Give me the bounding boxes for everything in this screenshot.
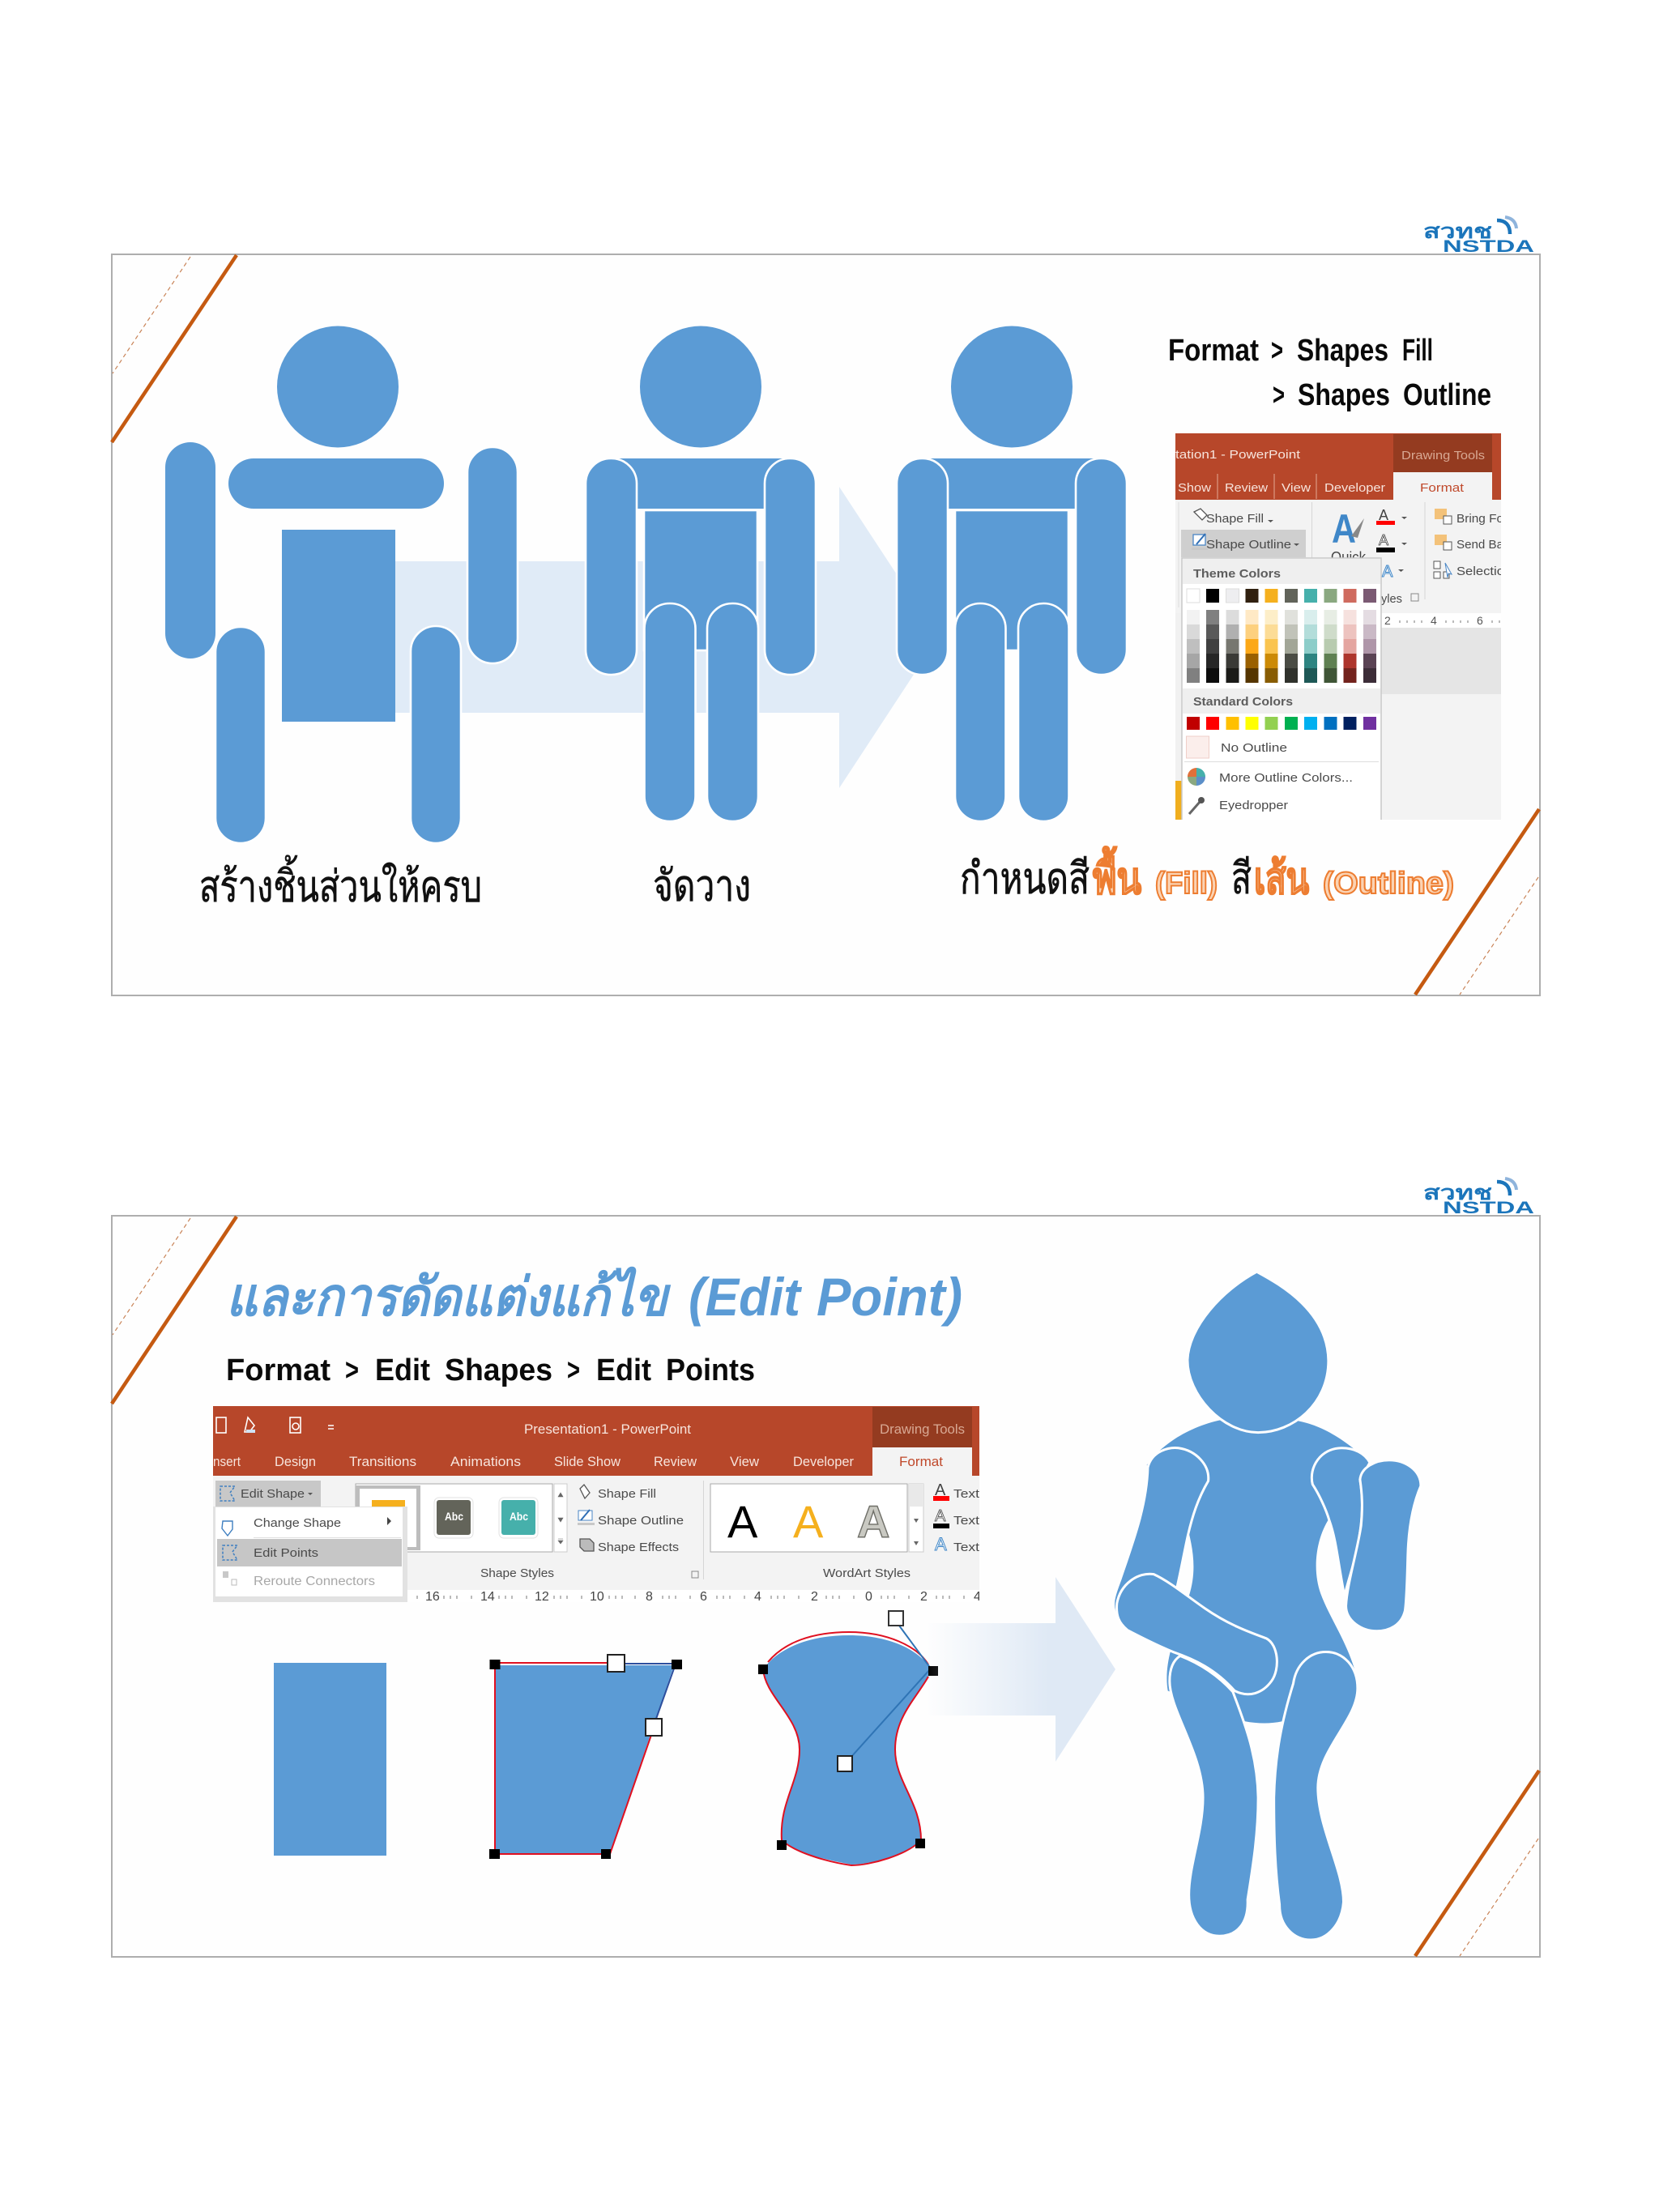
edit shape button: Edit Shape [241, 1487, 305, 1501]
heading: format shapes fill: Format [1168, 334, 1259, 368]
ruler: 4 [1431, 614, 1437, 627]
ribbon tabs: Design [275, 1454, 316, 1469]
ruler: 2 [920, 1590, 928, 1604]
menu item: eyedropper: Eyedropper [1219, 799, 1288, 812]
corner accents: slide 1 [112, 255, 1539, 995]
ribbon tabs: View [730, 1454, 760, 1469]
logo: NSTDA bottom slide [1423, 1178, 1534, 1217]
drawing tools tab: Drawing Tools [880, 1421, 965, 1437]
text fill, outline, effects commands: A [935, 1481, 946, 1499]
menu item: change shape: Change Shape [254, 1516, 341, 1530]
figure: coloured final [897, 326, 1127, 821]
title: edit point: และการดัดแต่งแก้ไข [226, 1266, 671, 1327]
ribbon body: Shape Fill [1206, 512, 1264, 526]
title: edit point: Point) [817, 1267, 962, 1327]
logo: NSTDA bottom slide: NSTDA [1443, 1199, 1534, 1217]
dropdown menu: edit shape [212, 1507, 407, 1602]
heading: format edit shapes edit points: Edit [596, 1353, 651, 1387]
ribbon tabs: Review [654, 1454, 697, 1469]
arrow: slide 2 progress [925, 1577, 1115, 1762]
corner accents: slide 2 [112, 1217, 1539, 1956]
menu item: reroute connectors [223, 1571, 375, 1588]
ribbon group labels: Shape Styles [480, 1566, 554, 1580]
arrow: slide 1 progress [394, 487, 938, 788]
panel: slide 1 frame [112, 254, 1540, 995]
menu item: edit points: Edit Points [254, 1546, 318, 1560]
shape style gallery: Abc [445, 1510, 463, 1523]
figure: seated person [1114, 1272, 1421, 1940]
menu item: no outline [1186, 736, 1287, 758]
ruler: 2 [1384, 614, 1391, 627]
drawing tools tab: Format [899, 1454, 943, 1469]
heading: format edit shapes edit points: Edit [375, 1353, 430, 1387]
menu item: eyedropper [1189, 797, 1288, 814]
left forearm [1117, 1574, 1277, 1694]
slide area behind menu [1175, 628, 1501, 820]
ribbon tabs: Developer [1324, 481, 1385, 495]
ribbon body [1175, 500, 1504, 613]
text fill, outline, effects commands: Text [953, 1487, 980, 1501]
ribbon tabs: Animations [450, 1454, 521, 1469]
shape: curved edited shape with handles [758, 1611, 938, 1865]
ribbon tabs: Transitions [349, 1454, 416, 1469]
ruler: 10 [590, 1590, 604, 1604]
ruler: 0 [865, 1590, 872, 1604]
caption: set fill and outline colours: พื้น [1093, 846, 1141, 903]
text fill, outline, effects commands: A [935, 1507, 946, 1525]
logo: NSTDA top slide: สวทช [1423, 220, 1492, 243]
heading: shapes outline: Outline [1403, 378, 1491, 412]
caption: set fill and outline colours: (Outline) [1323, 867, 1454, 901]
logo: NSTDA top slide [1423, 217, 1534, 256]
logo: NSTDA top slide: NSTDA [1443, 237, 1534, 256]
panel: slide 2 frame [112, 1216, 1540, 1957]
caption: set fill and outline colours: เส้น [1254, 855, 1309, 903]
logo: NSTDA bottom slide: สวทช [1423, 1182, 1492, 1204]
ruler: 14 [480, 1590, 495, 1604]
ribbon group labels [481, 1568, 911, 1579]
ruler: 8 [646, 1590, 653, 1604]
WordArt gallery: A [857, 1496, 889, 1547]
menu item: no outline: No Outline [1221, 741, 1287, 755]
heading: format edit shapes edit points: Shapes [445, 1353, 552, 1387]
dropdown menu: colours: Theme Colors [1193, 567, 1281, 581]
shape style gallery: Abc [510, 1510, 528, 1523]
ruler: 4 [754, 1590, 761, 1604]
ribbon body: Selectic [1456, 565, 1504, 578]
right forearm [1346, 1460, 1421, 1631]
shape fill, outline, effects commands [578, 1485, 684, 1554]
drawing tools tab: Format [1420, 481, 1465, 495]
ribbon tabs: Developer [793, 1454, 854, 1469]
heading: format edit shapes edit points: Points [666, 1353, 755, 1387]
title: edit point: (Edit [689, 1267, 803, 1327]
ribbon body: A [1379, 532, 1388, 548]
heading: format shapes fill: Fill [1402, 334, 1433, 368]
heading: format shapes fill [1168, 334, 1433, 368]
right upper arm [1311, 1448, 1370, 1596]
shape fill, outline, effects commands: Shape Effects [598, 1541, 679, 1554]
theme shade columns [1187, 610, 1376, 683]
title: edit point [226, 1266, 962, 1327]
torso [1147, 1420, 1370, 1724]
heading: format edit shapes edit points: > [567, 1353, 580, 1387]
ribbon tabs: Show [1178, 481, 1211, 495]
screenshot: PowerPoint edit shape menu: Presentation1 - PowerPoint [524, 1421, 691, 1437]
title bar [213, 1406, 979, 1476]
ribbon body: A [1332, 506, 1356, 552]
ruler: 16 [425, 1590, 440, 1604]
ruler: 2 [811, 1590, 818, 1604]
ribbon body: Quick [1331, 549, 1367, 565]
heading: format shapes fill: Shapes [1297, 334, 1388, 368]
caption: set fill and outline colours: (Fill) [1155, 867, 1218, 901]
shape fill, outline, effects commands: Shape Fill [598, 1487, 656, 1501]
ribbon body: Shape Outline [1206, 538, 1291, 552]
menu item: edit points [217, 1539, 402, 1566]
dropdown menu: colours: Standard Colors [1193, 695, 1293, 709]
standard colour swatches [1187, 717, 1376, 730]
shape style gallery [356, 1484, 567, 1552]
ribbon body: yles [1381, 592, 1402, 606]
heading: shapes outline: > [1273, 378, 1285, 412]
heading: shapes outline: Shapes [1298, 378, 1390, 412]
drawing tools tab [1393, 434, 1492, 500]
ribbon tabs [214, 1456, 854, 1469]
ruler: 4 [974, 1590, 981, 1604]
ruler [213, 1590, 981, 1604]
text fill, outline, effects commands: Text [953, 1541, 980, 1554]
figure: separate parts [165, 326, 518, 843]
screenshot: PowerPoint edit shape menu [212, 1406, 981, 1604]
ribbon tabs [1178, 474, 1385, 499]
menu item: more outline colors: More Outline Colors... [1219, 771, 1353, 785]
head [1188, 1272, 1328, 1433]
WordArt gallery: A [727, 1496, 758, 1547]
WordArt gallery [710, 1484, 923, 1552]
caption: arrange: จัดวาง [653, 862, 751, 910]
ribbon body: A [1382, 563, 1393, 581]
text fill, outline, effects commands: Text [953, 1514, 980, 1528]
ribbon body: A [1379, 507, 1388, 523]
dropdown menu: colours [1182, 558, 1381, 825]
ruler: 6 [1477, 614, 1483, 627]
heading: format edit shapes edit points: Format [226, 1353, 331, 1387]
ribbon tabs: Slide Show [554, 1454, 621, 1469]
menu item: more outline colors [1188, 768, 1353, 786]
ribbon tabs: nsert [213, 1454, 241, 1469]
caption: create all parts: สร้างชิ้นส่วนให้ครบ [199, 855, 482, 911]
menu item: change shape [222, 1516, 391, 1536]
ruler [1381, 613, 1501, 628]
caption: set fill and outline colours [960, 846, 1454, 903]
quick access icons [216, 1417, 334, 1433]
ribbon body: Bring Fo [1456, 512, 1503, 526]
ribbon body: Send Ba [1456, 538, 1504, 552]
figure: arranged parts [586, 326, 816, 821]
ribbon title bar [1175, 433, 1501, 500]
screenshot: PowerPoint shape outline menu: tation1 - PowerPoint [1175, 448, 1301, 462]
edit shape button [215, 1481, 321, 1507]
caption: set fill and outline colours: กำหนดสี [960, 855, 1090, 903]
heading: shapes outline [1273, 378, 1491, 412]
shape fill, outline, effects commands: Shape Outline [598, 1514, 684, 1528]
text fill, outline, effects commands [933, 1481, 980, 1554]
shape: edited trapezoid with handles [489, 1655, 682, 1859]
text fill, outline, effects commands: A [935, 1534, 947, 1554]
caption: set fill and outline colours: สี [1231, 855, 1252, 903]
shape: plain rectangle [274, 1663, 386, 1856]
screenshot: PowerPoint shape outline menu [1175, 433, 1504, 825]
WordArt gallery: A [793, 1496, 824, 1547]
drawing tools tab [872, 1407, 972, 1476]
ribbon tabs: View [1282, 481, 1311, 495]
left upper arm [1114, 1448, 1209, 1618]
menu item: reroute connectors: Reroute Connectors [254, 1575, 375, 1588]
heading: format shapes fill: > [1271, 334, 1283, 368]
drawing tools tab: Drawing Tools [1401, 449, 1485, 462]
ribbon tabs: Review [1225, 481, 1268, 495]
ruler: 6 [700, 1590, 707, 1604]
theme colour swatches [1187, 589, 1376, 603]
heading: format edit shapes edit points: > [345, 1353, 359, 1387]
ribbon group labels: WordArt Styles [823, 1566, 911, 1580]
left leg [1170, 1656, 1258, 1936]
ruler: 12 [535, 1590, 549, 1604]
right leg [1274, 1652, 1358, 1940]
heading: format edit shapes edit points [226, 1353, 755, 1387]
